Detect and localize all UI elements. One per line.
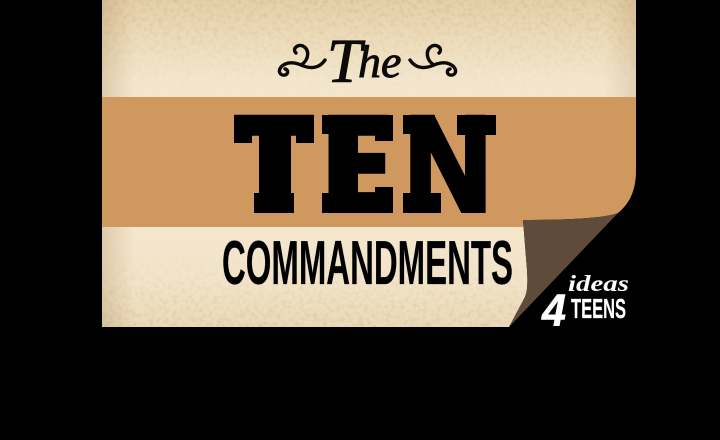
logo numeral: 4: 4 xyxy=(541,285,566,336)
logo word: ideas: ideas xyxy=(568,271,629,296)
heading: The xyxy=(279,28,456,96)
paper sheet xyxy=(102,0,636,327)
page curl xyxy=(509,213,618,327)
heading: TEN xyxy=(234,90,496,239)
letter T: T xyxy=(236,90,312,239)
cover infographic xyxy=(102,0,636,327)
logo: ideas 4 teens xyxy=(541,271,629,336)
logo word: TEENS: TEENS xyxy=(571,293,626,324)
letter N: N xyxy=(405,90,491,239)
ornament: left flourish xyxy=(279,46,325,75)
word: The: he xyxy=(358,36,401,87)
letter E: E xyxy=(324,90,392,239)
word: The: T xyxy=(327,28,366,96)
ornament: right flourish xyxy=(410,46,456,75)
orange band xyxy=(102,97,636,227)
